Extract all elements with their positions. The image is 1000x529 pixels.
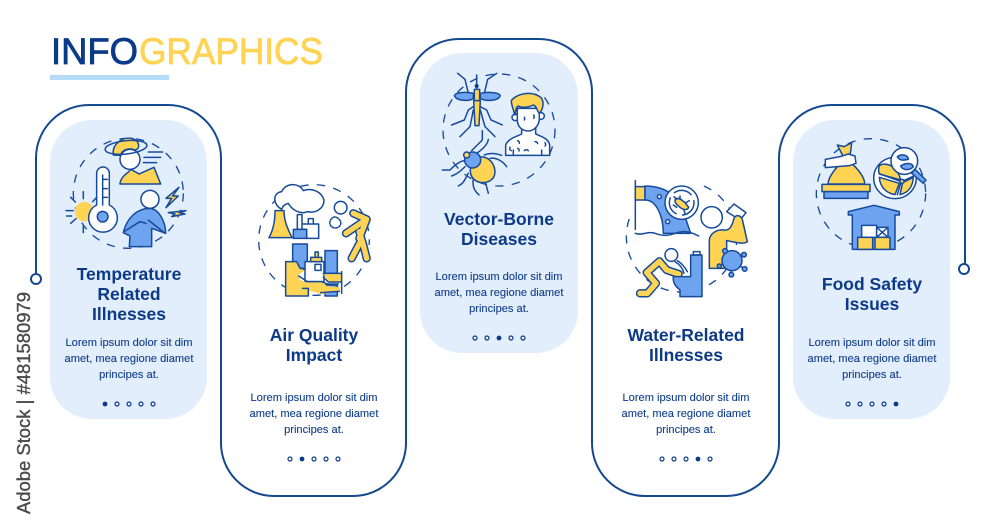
body text: [65, 337, 193, 381]
panel: temperature related illnesses: Related: [97, 284, 161, 304]
heading: Vector-Borne: [444, 209, 554, 229]
body text: amet, mea regione diamet: [250, 408, 378, 420]
icon: heat and thermometer: [66, 138, 186, 248]
panel: vector-borne diseases: Diseases: [461, 229, 537, 249]
body text: [622, 392, 750, 436]
stock id vertical label: Adobe Stock | #481580979: [14, 292, 34, 514]
panel: water-related illnesses: [622, 178, 750, 461]
body text: amet, mea regione diamet: [65, 353, 193, 365]
body text: [435, 271, 563, 315]
body text: Lorem ipsum dolor sit dim: [250, 392, 378, 404]
panel: air quality impact: Impact: [286, 345, 342, 365]
body text: [250, 392, 378, 436]
panel: temperature related illnesses: [50, 120, 207, 419]
body text: Lorem ipsum dolor sit dim: [808, 337, 936, 349]
heading: Food Safety: [822, 274, 922, 294]
heading: Temperature: [77, 264, 182, 284]
panel: air quality impact: [250, 185, 378, 461]
heading: Air Quality: [270, 325, 359, 345]
icon: food bag, meat and warehouse: [816, 139, 926, 249]
body text: principes at.: [284, 424, 344, 436]
title: INFO: [51, 31, 138, 72]
body text: Lorem ipsum dolor sit dim: [435, 271, 563, 283]
panel: temperature related illnesses: Illnesses: [92, 304, 166, 324]
pagination dots: [660, 457, 712, 461]
pagination dots: [846, 402, 898, 406]
body text: amet, mea regione diamet: [435, 287, 563, 299]
body text: amet, mea regione diamet: [808, 353, 936, 365]
panel: food safety issues: [793, 120, 950, 419]
icon: factory and pollution: [259, 185, 369, 296]
body text: principes at.: [469, 303, 529, 315]
panel: food safety issues: Issues: [845, 294, 900, 314]
body text: Lorem ipsum dolor sit dim: [622, 392, 750, 404]
icon: mosquito, tick and rash: [442, 73, 555, 195]
heading: Water-Related: [627, 325, 745, 345]
title: GRAPHICS: [139, 31, 323, 72]
title: [50, 31, 323, 80]
pagination dots: [473, 336, 525, 340]
pagination dots: [103, 402, 155, 406]
panel: vector-borne diseases: [420, 53, 578, 353]
body text: Lorem ipsum dolor sit dim: [65, 337, 193, 349]
body text: [808, 337, 936, 381]
body text: principes at.: [842, 369, 902, 381]
pagination dots: [288, 457, 340, 461]
body text: principes at.: [99, 369, 159, 381]
panel: water-related illnesses: Illnesses: [649, 345, 723, 365]
icon: contaminated water and sickness: [626, 178, 747, 297]
body text: amet, mea regione diamet: [622, 408, 750, 420]
body text: principes at.: [656, 424, 716, 436]
